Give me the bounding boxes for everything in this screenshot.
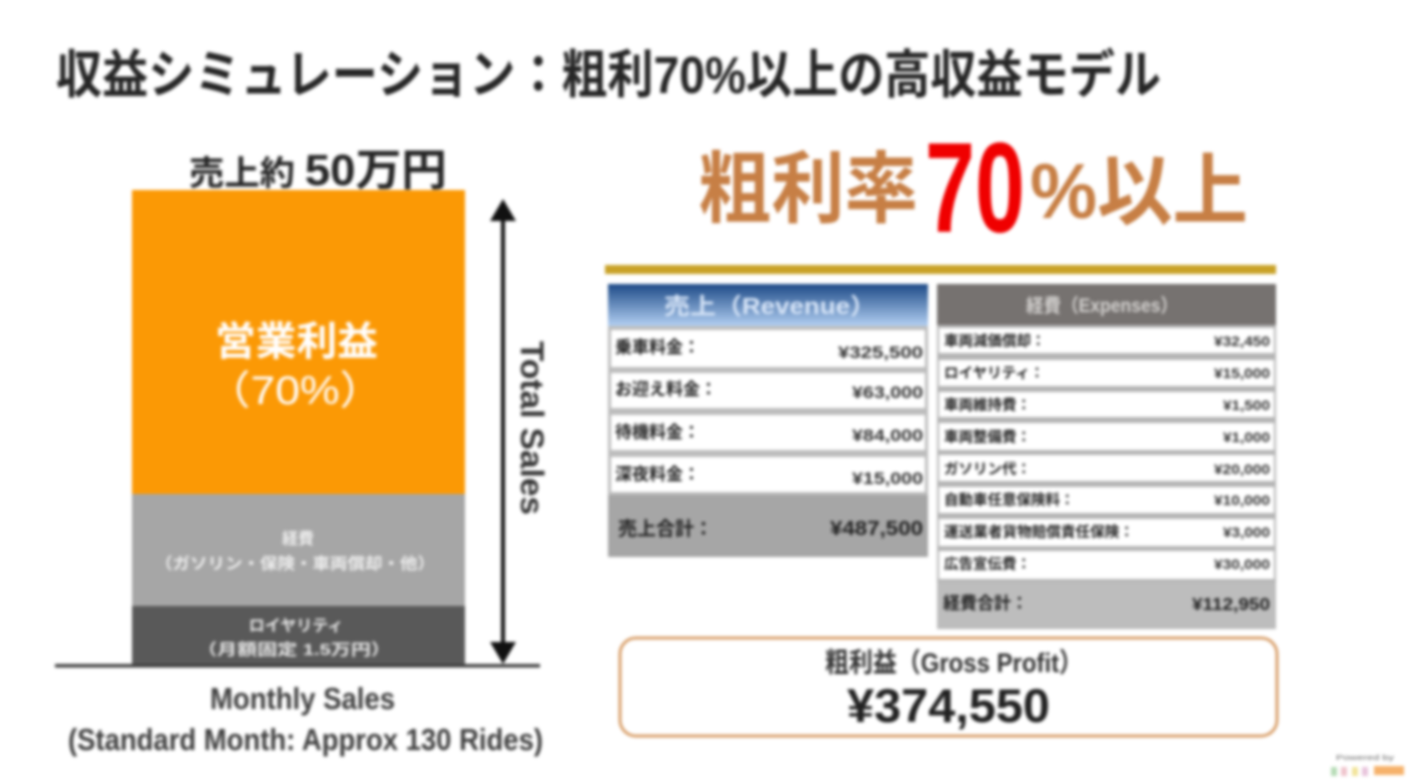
row: depreciation: 車両減価償却： <box>944 333 1046 350</box>
title: 収益シミュレーション：粗利70%以上の高収益モデル <box>56 47 1161 105</box>
row: freight liability insurance: ¥3,000 <box>1223 524 1270 540</box>
row: expenses total <box>937 582 1276 628</box>
headline: gross margin: 70 <box>925 117 1025 260</box>
row: gasoline: ¥20,000 <box>1214 461 1270 477</box>
row: vehicle servicing <box>939 423 1274 450</box>
revenue header <box>608 284 928 326</box>
callout: gross profit: 粗利益（Gross Profit） <box>825 648 1083 678</box>
bar total heading: 売上約 50万円 <box>189 146 447 195</box>
row: ride fare: ¥325,500 <box>838 343 923 362</box>
expenses header: 経費（Expenses） <box>1026 295 1178 317</box>
panel: expenses table <box>937 284 1276 629</box>
row: vehicle maintenance <box>939 392 1274 417</box>
segment: operating profit: （70%） <box>206 369 384 413</box>
headline: gross margin: 粗利率 <box>698 145 918 233</box>
row: royalty: ロイヤリティ： <box>944 366 1044 382</box>
row: ride fare <box>611 330 925 367</box>
row: auto liability insurance: ¥10,000 <box>1214 492 1270 508</box>
row: pickup fare: お迎え料金： <box>615 379 717 399</box>
row: pickup fare <box>611 373 925 408</box>
row: advertising <box>939 551 1274 579</box>
gold divider <box>605 265 1276 274</box>
row: expenses total: ¥112,950 <box>1192 594 1270 614</box>
segment: royalty: ロイヤリティ <box>249 618 343 635</box>
row: ride fare: 乗車料金： <box>615 337 700 357</box>
axis caption: (Standard Month: Approx 130 Rides) <box>68 722 543 757</box>
row: revenue total: ¥487,500 <box>830 518 923 540</box>
row: late-night fare <box>611 457 925 492</box>
row: gasoline <box>939 455 1274 481</box>
panel: monthly sales stacked bar <box>55 146 550 757</box>
row: royalty: ¥15,000 <box>1214 365 1270 381</box>
expenses header <box>937 284 1276 325</box>
callout: gross profit <box>620 638 1277 736</box>
segment: operating profit: 営業利益 <box>215 320 378 364</box>
segment: royalty <box>132 606 465 664</box>
segment: expenses: （ガソリン・保険・車両償却・他） <box>155 554 435 573</box>
row: waiting fare: ¥84,000 <box>852 426 923 445</box>
row: auto liability insurance <box>939 487 1274 513</box>
row: expenses total: 経費合計： <box>943 594 1028 613</box>
row: vehicle maintenance: 車両維持費： <box>944 396 1031 414</box>
row: freight liability insurance: 運送業者貨物賠償責任保険： <box>944 523 1134 541</box>
row: vehicle maintenance: ¥1,500 <box>1223 397 1270 413</box>
axis caption: Monthly Sales <box>210 681 395 716</box>
row: waiting fare <box>611 415 925 450</box>
axis caption <box>68 681 543 757</box>
row: revenue total: 売上合計： <box>618 517 713 540</box>
segment: expenses <box>132 494 465 606</box>
logo: bottom-right app mark: Powered by <box>1336 755 1395 762</box>
callout: gross profit: ¥374,550 <box>847 679 1050 732</box>
row: pickup fare: ¥63,000 <box>852 383 923 402</box>
logo: bottom-right app mark <box>1331 755 1404 776</box>
segment: operating profit <box>132 190 465 494</box>
row: royalty <box>939 360 1274 386</box>
row: late-night fare: ¥15,000 <box>852 469 923 488</box>
headline: gross margin: %以上 <box>1030 147 1248 235</box>
segment: royalty: （月額固定 1.5万円） <box>197 641 391 659</box>
baseline axis <box>55 664 540 668</box>
headline: gross margin <box>698 117 1248 260</box>
row: waiting fare: 待機料金： <box>615 422 700 442</box>
row: vehicle servicing: ¥1,000 <box>1223 429 1270 445</box>
row: late-night fare: 深夜料金： <box>615 464 700 484</box>
revenue header: 売上（Revenue） <box>664 293 876 319</box>
arrow: total sales height <box>490 199 516 664</box>
row: auto liability insurance: 自動車任意保険料： <box>944 491 1074 509</box>
panel: revenue table <box>608 284 928 557</box>
row: gasoline: ガソリン代： <box>944 461 1031 478</box>
row: advertising: ¥30,000 <box>1214 556 1270 572</box>
row: depreciation <box>939 328 1274 353</box>
row: revenue total <box>608 495 928 557</box>
segment: expenses: 経費 <box>282 530 314 548</box>
row: depreciation: ¥32,450 <box>1214 333 1270 349</box>
label: total sales: Total Sales <box>514 341 550 515</box>
row: advertising: 広告宣伝費： <box>944 555 1031 573</box>
row: vehicle servicing: 車両整備費： <box>944 429 1031 446</box>
row: freight liability insurance <box>939 519 1274 546</box>
